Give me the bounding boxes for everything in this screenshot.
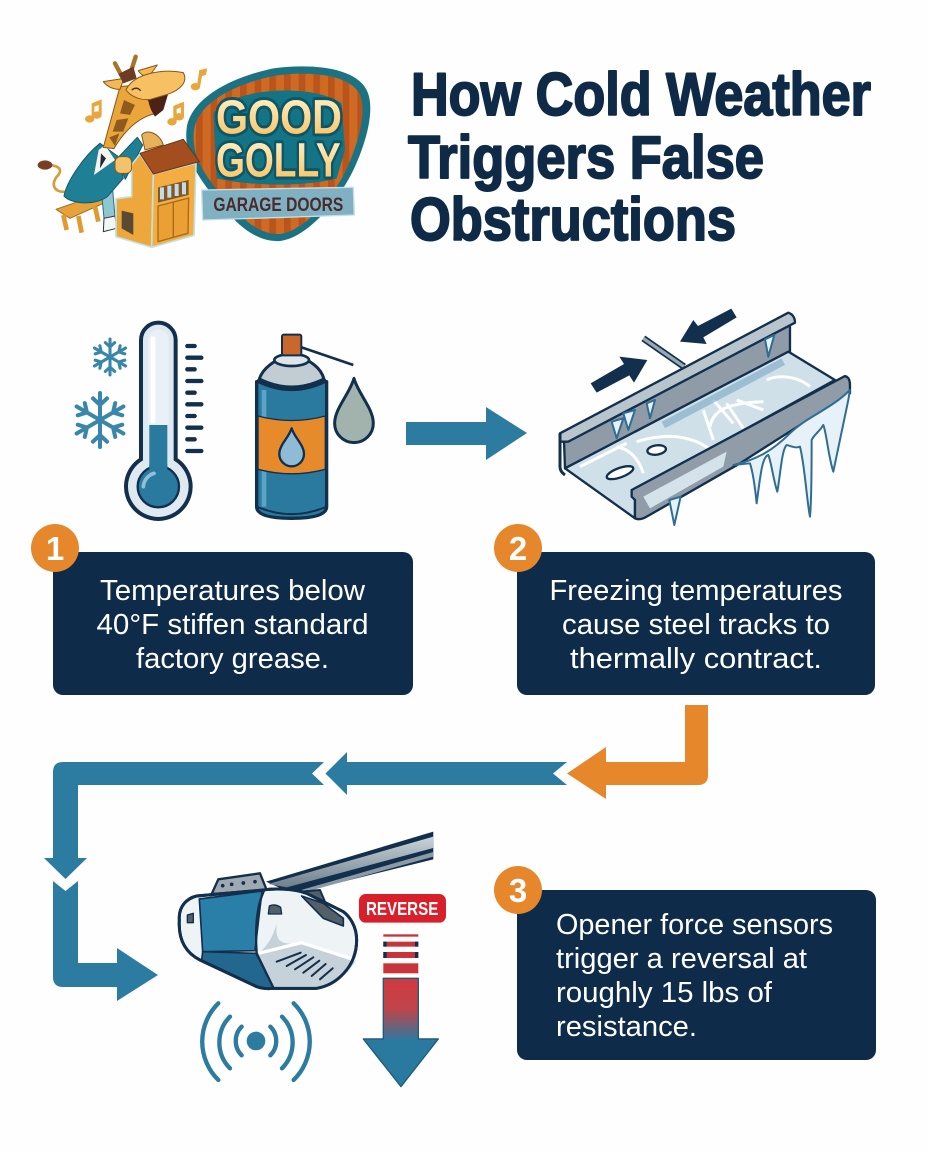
warning bars bbox=[383, 934, 418, 973]
step 2 number badge: 2 bbox=[509, 530, 527, 567]
step 1 text bbox=[96, 575, 368, 675]
logo: music notes bbox=[85, 68, 207, 126]
step 2 text bbox=[550, 575, 842, 675]
step 3 text: resistance. bbox=[556, 1011, 697, 1043]
step 1 number badge bbox=[31, 524, 79, 572]
icicles bbox=[612, 335, 850, 525]
step 3 text: trigger a reversal at bbox=[556, 943, 807, 975]
panel: step 2 bbox=[494, 524, 875, 695]
far wall bbox=[564, 324, 790, 468]
step 3 number badge: 3 bbox=[509, 872, 527, 909]
arrow: step 1 to step 2 bbox=[406, 407, 527, 460]
logo: giraffe pianist bbox=[38, 57, 185, 233]
icon: spray can and grease drop bbox=[257, 335, 373, 518]
contraction indicator arrows bbox=[591, 309, 737, 393]
panel: step 3 bbox=[494, 866, 876, 1060]
step 3 text bbox=[556, 909, 833, 1043]
arrow: blue connector left and down bbox=[44, 762, 324, 879]
title bbox=[408, 61, 871, 253]
icon: garage door opener bbox=[179, 832, 433, 989]
logo banner: GARAGE DOORS bbox=[213, 195, 343, 216]
step 2 text: thermally contract. bbox=[570, 643, 822, 675]
title line 1: How Cold Weather bbox=[411, 61, 871, 128]
logo badge bbox=[186, 66, 370, 241]
reverse label bbox=[359, 894, 446, 923]
step 3 number badge bbox=[494, 866, 542, 914]
icon: thermometer bbox=[126, 323, 201, 519]
down arrow bbox=[363, 978, 438, 1087]
step 2 text: Freezing temperatures bbox=[550, 575, 842, 607]
reverse label: REVERSE bbox=[366, 898, 438, 919]
step 1 text: Temperatures below bbox=[100, 575, 365, 607]
logo wordmark: GOLLY bbox=[216, 134, 341, 188]
far lip bbox=[560, 313, 795, 442]
icon: sensor signal waves bbox=[202, 1003, 310, 1080]
icon: frozen contracting steel track bbox=[560, 309, 850, 525]
step 2 text: cause steel tracks to bbox=[562, 609, 830, 641]
logo wordmark bbox=[216, 90, 342, 188]
arrow: blue connector middle bbox=[326, 752, 567, 795]
icon: snowflakes bbox=[73, 339, 128, 447]
logo banner bbox=[202, 187, 354, 220]
step 1 text: 40°F stiffen standard bbox=[96, 609, 368, 641]
logo: garage piano house bbox=[115, 139, 199, 247]
housing bbox=[179, 889, 357, 989]
step 1 text: factory grease. bbox=[136, 643, 329, 675]
arrow: blue connector to opener bbox=[53, 881, 158, 1001]
title line 2: Triggers False bbox=[408, 124, 764, 191]
track floor with frost bbox=[565, 352, 835, 518]
rail bbox=[266, 832, 433, 894]
step 3 text: Opener force sensors bbox=[556, 909, 833, 941]
large snowflake bbox=[73, 393, 127, 447]
step 1 number badge: 1 bbox=[46, 530, 64, 567]
panel: step 1 bbox=[31, 524, 413, 695]
icon: reverse label and downward arrow bbox=[359, 894, 446, 1087]
step 3 text: roughly 15 lbs of bbox=[556, 977, 772, 1009]
title line 3: Obstructions bbox=[410, 186, 736, 253]
small snowflake bbox=[92, 339, 128, 375]
logo wordmark: GOOD bbox=[216, 90, 342, 144]
mount bracket bbox=[212, 873, 267, 894]
logo: Good Golly Garage Doors bbox=[38, 57, 370, 247]
step 2 number badge bbox=[494, 524, 542, 572]
arrow: orange elbow from step 2 bbox=[567, 705, 708, 799]
near wall bbox=[632, 376, 850, 519]
